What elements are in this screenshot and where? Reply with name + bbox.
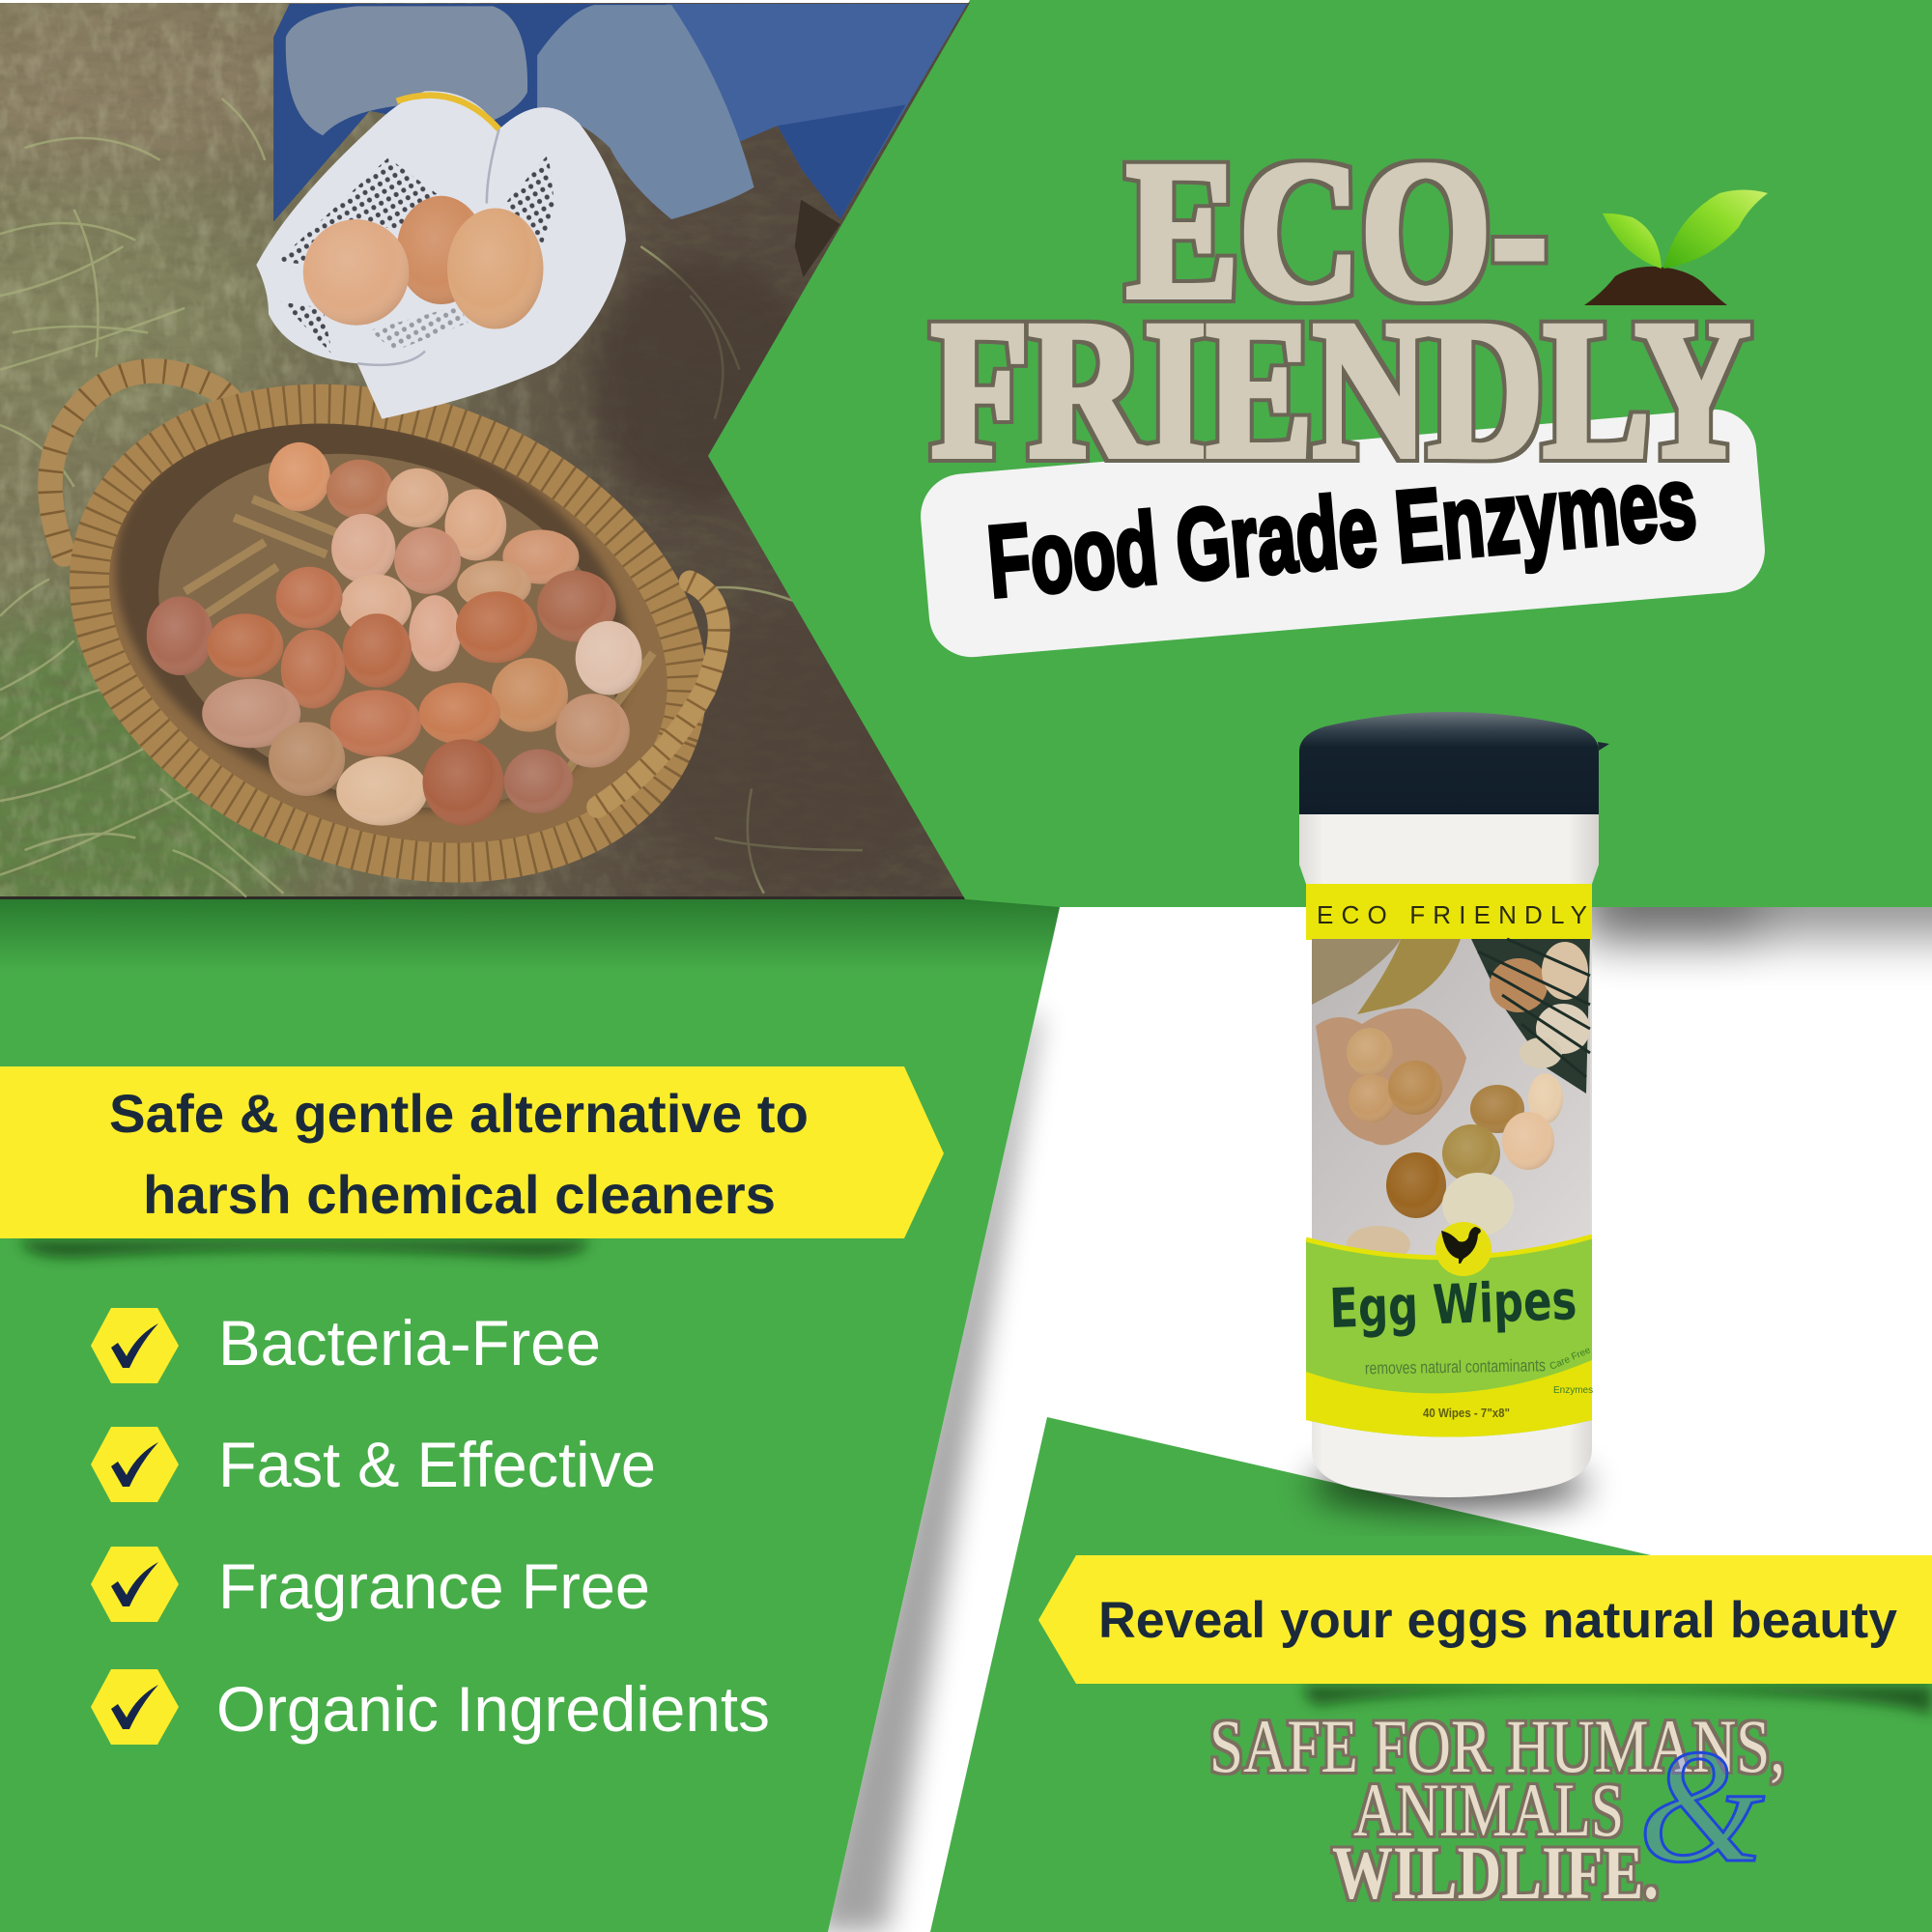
item: Fast and Effective: Fast & Effective bbox=[218, 1429, 656, 1500]
icon: check Fragrance Free bbox=[91, 1547, 179, 1622]
tagline: safe for humans, animals and wildlife bbox=[1209, 1704, 1785, 1915]
panel: bottom right green bbox=[930, 1417, 1932, 1932]
shadow under left banner bbox=[19, 1240, 589, 1257]
shadow under right banner bbox=[1304, 1686, 1932, 1715]
yellow banner right bbox=[1038, 1555, 1932, 1684]
white label panel bbox=[917, 406, 1769, 661]
checklist bbox=[91, 1307, 770, 1745]
icon: seedling bbox=[1584, 189, 1768, 305]
jeans and sleeves bbox=[273, 4, 967, 222]
product: Egg Wipes canister bbox=[1299, 712, 1609, 1497]
banner text: safe and gentle: Safe & gentle alternative to bbox=[109, 1083, 809, 1144]
item: Bacteria-Free: Bacteria-Free bbox=[218, 1307, 601, 1378]
panel: top right green bbox=[708, 0, 1932, 907]
yellow banner left bbox=[0, 1066, 944, 1238]
icon: check Bacteria-Free bbox=[91, 1308, 179, 1383]
grass blades bbox=[0, 99, 863, 897]
label: Care Free Enzymes logo bbox=[1548, 1345, 1593, 1396]
product shadow bbox=[1309, 1461, 1589, 1511]
label: chicken badge bbox=[1435, 1222, 1492, 1276]
eggs in hand bbox=[303, 196, 543, 329]
icon: check Organic Ingredients bbox=[91, 1669, 179, 1745]
label: Care Free Enzymes logo: Enzymes bbox=[1553, 1385, 1593, 1396]
banner text: safe and gentle: harsh chemical cleaners bbox=[143, 1164, 776, 1225]
white gloves bbox=[256, 91, 626, 419]
title: Eco-Friendly bbox=[931, 121, 1750, 499]
item: Fragrance Free: Fragrance Free bbox=[218, 1550, 650, 1622]
banner text: reveal natural beauty: Reveal your eggs natural beauty bbox=[1098, 1592, 1898, 1649]
tagline: safe for humans, animals and wildlife: SAFE FOR HUMANS, bbox=[1209, 1704, 1785, 1788]
shadow below photo bbox=[0, 899, 1060, 972]
label: Egg Wipes: Egg Wipes bbox=[1328, 1269, 1577, 1341]
basket eggs bbox=[147, 442, 642, 826]
photo: hands holding eggs over basket bbox=[0, 0, 976, 966]
label: ECO FRIENDLY: ECO FRIENDLY bbox=[1317, 900, 1587, 929]
tagline: safe for humans, animals and wildlife: ANIMALS bbox=[1353, 1768, 1624, 1852]
title: Eco-Friendly: FRIENDLY bbox=[931, 280, 1750, 499]
item: Organic Ingredients: Organic Ingredients bbox=[216, 1673, 770, 1745]
banner text: safe and gentle bbox=[109, 1083, 809, 1225]
title: Eco-Friendly: ECO- bbox=[1126, 121, 1548, 340]
basket bbox=[38, 358, 730, 883]
label: removes natural contaminants: removes natural contaminants bbox=[1365, 1355, 1546, 1378]
tagline: safe for humans, animals and wildlife: WILDLIFE. bbox=[1332, 1831, 1659, 1915]
panel: left green bbox=[0, 899, 1060, 1932]
shadow on white area bbox=[811, 855, 1932, 1932]
soil patch bbox=[591, 259, 813, 505]
label: Care Free Enzymes logo: Care Free bbox=[1548, 1345, 1593, 1373]
icon: check Fast and Effective bbox=[91, 1427, 179, 1502]
label: size: 40 Wipes - 7"x8" bbox=[1423, 1406, 1510, 1420]
ampersand: & bbox=[1638, 1717, 1765, 1896]
